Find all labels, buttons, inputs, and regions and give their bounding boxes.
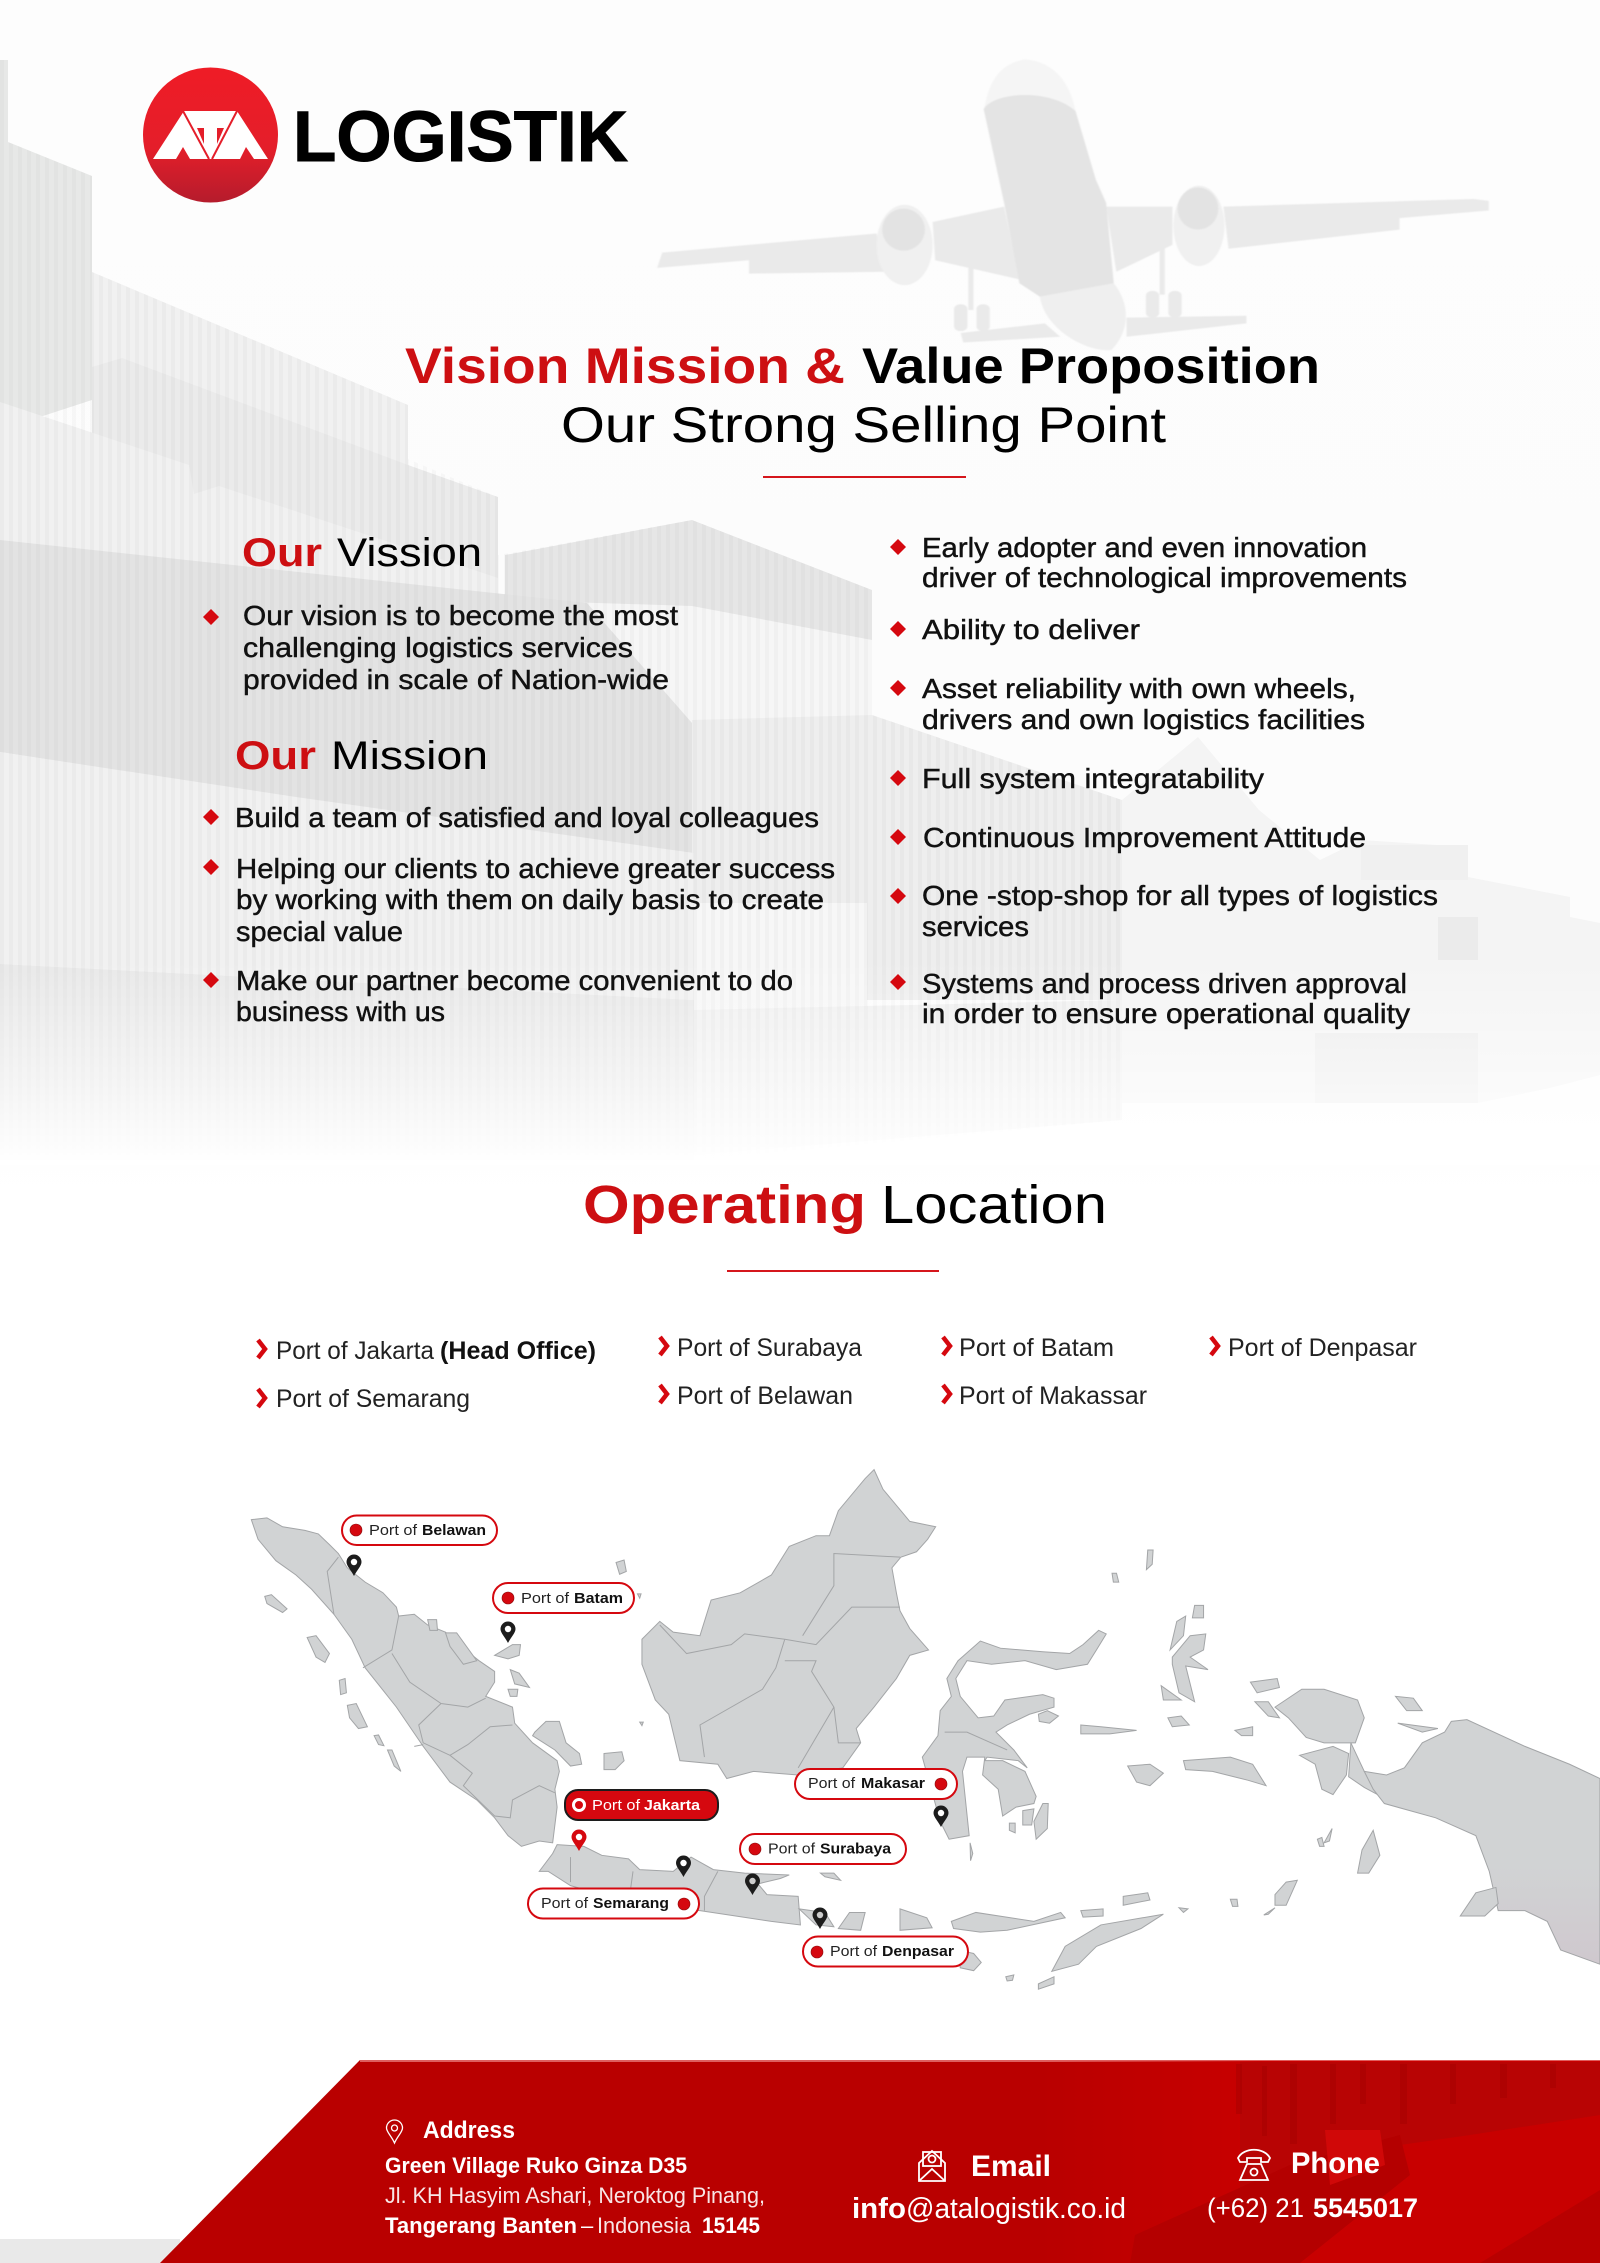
- heading: our vision: Vission: [337, 531, 482, 575]
- bullet: one stop shop: One -stop-shop for all types of logistics: [922, 880, 1438, 911]
- label: Port of Denpasar: Port of: [830, 1943, 878, 1960]
- bullet: ability to deliver: Ability to deliver: [922, 614, 1140, 645]
- label: Port of Denpasar: Denpasar: [882, 1943, 954, 1960]
- heading: our mission: Mission: [331, 734, 488, 778]
- label: Port of Semarang: [528, 1888, 699, 1918]
- pin: Surabaya: [745, 1874, 760, 1895]
- footer corner band: [0, 2239, 180, 2263]
- map: eastern islands: [900, 1550, 1600, 1989]
- phone block: (+62) 21: [1207, 2193, 1304, 2223]
- email block: @atalogistik.co.id: [906, 2193, 1126, 2225]
- bullet: asset reliability: Asset reliability with own wheels,: [922, 673, 1356, 704]
- address block: –: [581, 2213, 594, 2238]
- label: Port of Belawan: [342, 1516, 497, 1545]
- label: Port of Batam: [493, 1583, 634, 1613]
- bullet: systems and process: Systems and process driven approval: [922, 968, 1407, 999]
- port: Jakarta: Port of Jakarta: [276, 1337, 434, 1365]
- address block: Tangerang Banten: [385, 2213, 577, 2238]
- port: Surabaya: Port of Surabaya: [677, 1334, 862, 1362]
- logo: ATA Logistik: [143, 68, 628, 202]
- label: Port of Surabaya: [740, 1834, 906, 1864]
- label: Port of Makasar: [795, 1769, 957, 1799]
- bullet: continuous improvement: Continuous Improvement Attitude: [923, 822, 1366, 853]
- heading: our mission: Our: [235, 734, 316, 778]
- port: Jakarta: [258, 1337, 596, 1365]
- heading: our mission: [235, 734, 488, 778]
- page background: [0, 0, 1600, 1200]
- port: Jakarta: (Head Office): [440, 1337, 596, 1365]
- pin: Makassar: [934, 1806, 948, 1827]
- address block: Address: [423, 2117, 515, 2144]
- background photo: stacked containers: [0, 50, 1600, 1170]
- port: Batam: Port of Batam: [959, 1334, 1114, 1362]
- address block: [385, 2117, 765, 2238]
- title: vision mission and value proposition: [405, 338, 1320, 478]
- address block: Green Village Ruko Ginza D35: [385, 2153, 687, 2178]
- bullet: asset reliability: drivers and own logistics facilities: [922, 704, 1365, 735]
- label: Port of Batam: Port of: [521, 1590, 570, 1607]
- bullet: mission 2: [203, 853, 835, 947]
- icon: location pin: [386, 2120, 402, 2143]
- label: Port of Makasar: Port of: [808, 1775, 856, 1792]
- logo emblem: [143, 68, 278, 202]
- label: Port of Semarang: Port of: [541, 1895, 589, 1912]
- bullet: mission 3: business with us: [236, 996, 445, 1027]
- logo wordmark: LOGISTIK: [293, 98, 628, 177]
- label: Port of Surabaya: Surabaya: [820, 1840, 892, 1858]
- bullet: one stop shop: [890, 880, 1438, 942]
- label: Port of Belawan: Port of: [369, 1522, 418, 1539]
- icon: email: [919, 2151, 945, 2181]
- label: Port of Makasar: Makasar: [861, 1775, 925, 1792]
- bullet: early adopter: driver of technological improvements: [922, 562, 1407, 593]
- port: Makassar: Port of Makassar: [959, 1382, 1147, 1410]
- address block: 15145: [702, 2213, 760, 2238]
- email block: Email: [971, 2150, 1051, 2183]
- label: Port of Batam: Batam: [574, 1590, 623, 1607]
- label: Port of Denpasar: [803, 1936, 968, 1966]
- bullet: system integratability: Full system integratability: [922, 763, 1264, 794]
- heading: operating location: Operating: [583, 1175, 866, 1235]
- title: vision mission and value proposition: Value Proposition: [862, 338, 1320, 394]
- phone block: Phone: [1291, 2147, 1380, 2180]
- port: Semarang: Port of Semarang: [276, 1385, 470, 1413]
- label: Port of Jakarta: [565, 1790, 718, 1820]
- pin: Belawan: [346, 1555, 362, 1576]
- heading: our vision: Our: [242, 531, 322, 575]
- phone block: [1207, 2147, 1418, 2223]
- heading: operating location: Location: [881, 1175, 1107, 1235]
- map: western islands: [251, 1470, 936, 1930]
- bullet: mission 1: Build a team of satisfied and loyal colleagues: [235, 802, 819, 833]
- pin: Batam: [500, 1622, 516, 1643]
- label: Port of Semarang: Semarang: [593, 1895, 669, 1912]
- label: Port of Surabaya: Port of: [768, 1840, 816, 1858]
- label: Port of Jakarta: Jakarta: [644, 1797, 701, 1814]
- bullet: early adopter: [890, 532, 1407, 593]
- bullet: mission 3: [203, 965, 793, 1027]
- heading: operating location: [583, 1175, 1107, 1272]
- bullet: vision statement: provided in scale of Nation-wide: [243, 664, 669, 695]
- bullet: one stop shop: services: [922, 911, 1029, 942]
- bullet: systems and process: [890, 968, 1410, 1029]
- label: Port of Belawan: Belawan: [422, 1522, 486, 1539]
- email block: [852, 2150, 1126, 2225]
- email block: info: [852, 2193, 906, 2225]
- bullet: mission 2: by working with them on daily basis to create: [236, 884, 824, 915]
- map of Indonesia: [251, 1470, 1600, 1989]
- bullet: vision statement: [203, 600, 678, 695]
- pin: Denpasar: [812, 1908, 828, 1929]
- bullet: mission 2: Helping our clients to achieve greater success: [236, 853, 835, 884]
- title: vision mission and value proposition: Our Strong Selling Point: [561, 397, 1166, 453]
- footer panel: [160, 2060, 1600, 2263]
- address block: Indonesia: [597, 2213, 692, 2238]
- bullet: early adopter: Early adopter and even innovation: [922, 532, 1367, 563]
- label: Port of Jakarta: Port of: [592, 1797, 641, 1814]
- icon: telephone: [1238, 2150, 1270, 2180]
- bullet: mission 3: Make our partner become convenient to do: [236, 965, 793, 996]
- panel: our vision: [203, 531, 678, 695]
- footer port photo: [1040, 2061, 1600, 2263]
- pin: Semarang: [676, 1856, 691, 1877]
- panel: our mission: [203, 734, 835, 1027]
- pin: Jakarta: [572, 1830, 586, 1851]
- bullet: asset reliability: [890, 673, 1365, 735]
- bullet: systems and process: in order to ensure operational quality: [922, 998, 1410, 1029]
- heading: our vision: [242, 531, 482, 575]
- port: Belawan: Port of Belawan: [677, 1382, 853, 1410]
- bullet: vision statement: Our vision is to become the most: [243, 600, 678, 631]
- port: Denpasar: Port of Denpasar: [1228, 1334, 1417, 1362]
- bullet: vision statement: challenging logistics services: [243, 632, 633, 663]
- address block: Jl. KH Hasyim Ashari, Neroktog Pinang,: [385, 2183, 765, 2208]
- background photo: airplane: [657, 59, 1489, 350]
- bullet: mission 2: special value: [236, 916, 403, 947]
- panel: selling points: [890, 532, 1438, 1029]
- title: vision mission and value proposition: Vision Mission &: [405, 338, 845, 394]
- phone block: 5545017: [1313, 2193, 1418, 2223]
- port list: [258, 1334, 1417, 1413]
